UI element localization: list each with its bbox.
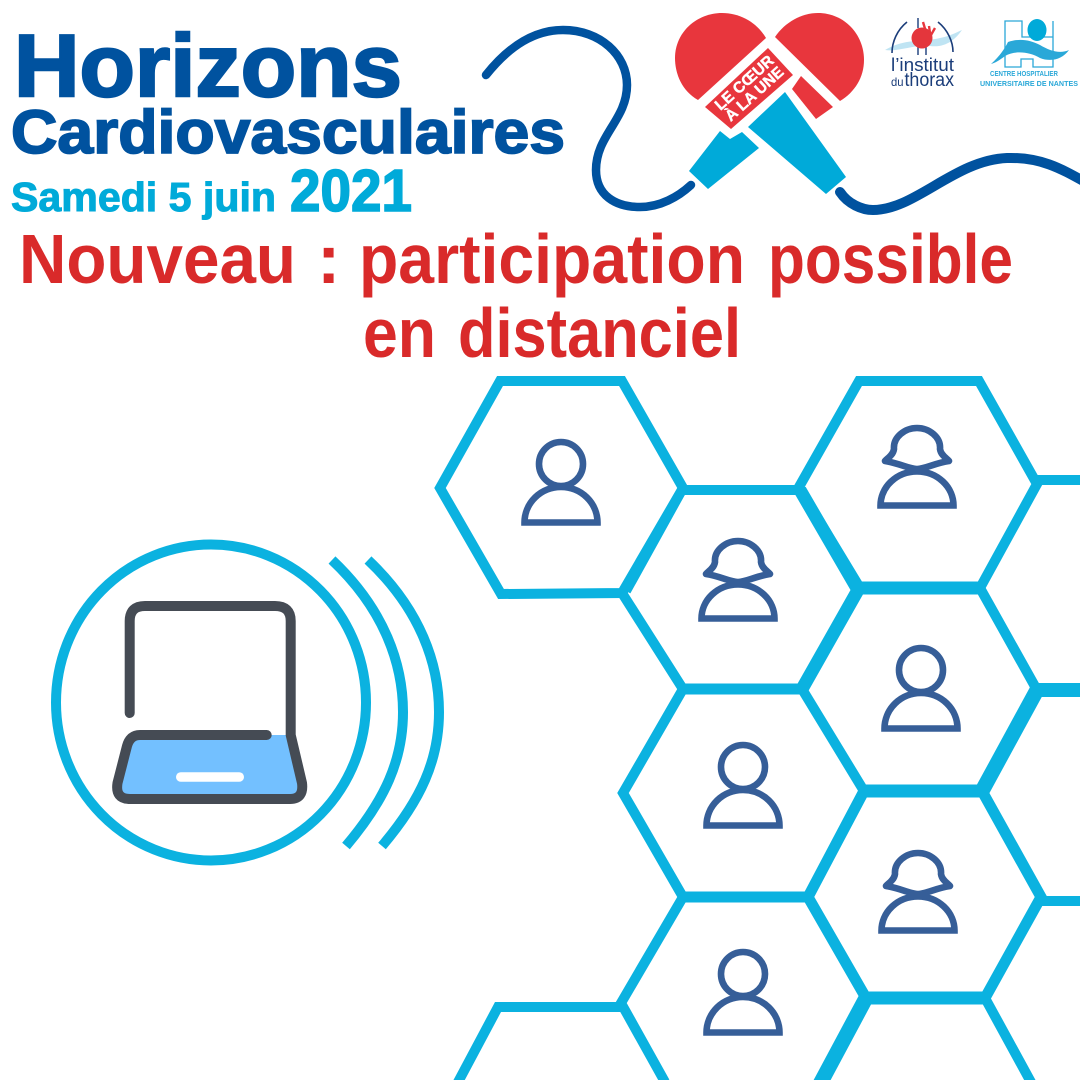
icon: laptop in circle with signal waves <box>56 544 439 860</box>
microphone handle large <box>748 92 846 194</box>
laptop keyboard base <box>117 735 302 799</box>
honeycomb network of participants <box>440 381 1080 1080</box>
person icon: man <box>706 745 780 826</box>
circle <box>56 544 366 860</box>
laptop outline <box>117 606 302 799</box>
title: Cardiovasculaires: Cardiovasculaires <box>11 98 565 166</box>
header title block <box>11 16 565 224</box>
microphone cable right <box>840 158 1080 210</box>
headline line 2 <box>363 294 741 372</box>
date: 2021: 2021 <box>290 158 412 224</box>
headline line 1 <box>19 220 1013 298</box>
title: Horizons: Horizons <box>14 16 402 115</box>
microphone band with slogan <box>705 48 793 129</box>
institut wordmark line 1: l’institut <box>891 55 954 75</box>
heart lower right piece <box>792 76 833 119</box>
logo: CHU de Nantes <box>980 19 1078 88</box>
CHU emblem <box>991 19 1069 67</box>
slogan text: LE CŒUR <box>712 52 778 114</box>
institut wordmark line 2: duthorax <box>891 70 954 91</box>
signal wave outer <box>368 560 439 846</box>
headline line 1: participation <box>359 220 745 298</box>
person icon: man <box>524 442 598 522</box>
hexagon lattice <box>440 381 1080 1080</box>
logo: institut du thorax <box>885 18 962 91</box>
microphone handle small <box>689 131 759 189</box>
microphone cable left <box>486 30 691 207</box>
date: Samedi 5 juin: Samedi 5 juin <box>11 174 276 220</box>
headline line 2: en <box>363 294 436 372</box>
person icon: man <box>706 952 780 1032</box>
thorax emblem <box>885 18 962 55</box>
person icon: woman <box>702 541 774 618</box>
signal wave inner <box>332 560 403 846</box>
person icon: woman <box>882 853 954 930</box>
headline line 2: distanciel <box>458 294 741 372</box>
heart left lobe <box>675 13 766 100</box>
headline line 1: : <box>317 220 340 298</box>
thick lattice segments <box>683 490 1080 1080</box>
CHU name line 1: CENTRE HOSPITALIER <box>990 69 1058 78</box>
laptop trackpad bar <box>176 772 244 782</box>
person icon: woman <box>880 428 954 506</box>
headline line 1: possible <box>768 220 1013 298</box>
logo: le coeur a la une microphones <box>486 13 1080 210</box>
person icon: man <box>884 648 958 728</box>
headline <box>19 220 1013 372</box>
headline line 1: Nouveau <box>19 220 296 298</box>
heart right lobe <box>775 13 864 101</box>
slogan text: À LA UNE <box>722 64 787 125</box>
